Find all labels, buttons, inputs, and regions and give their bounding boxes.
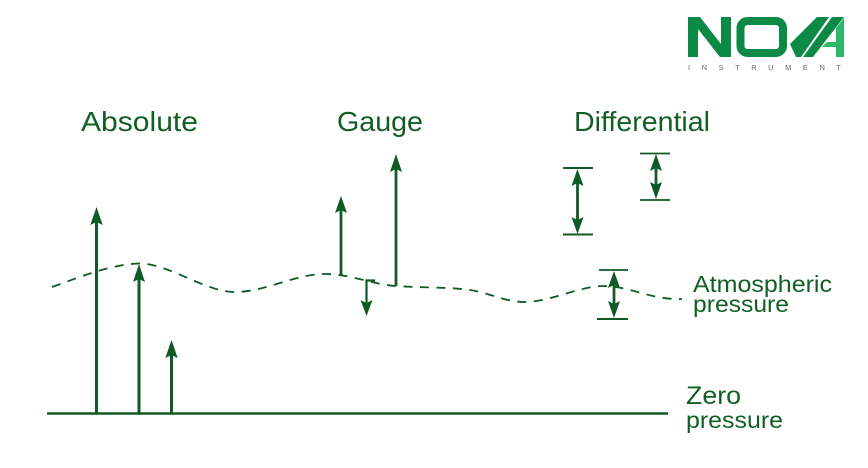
label: atmospheric pressure: pressure [693, 291, 789, 317]
heading: Gauge: Gauge [337, 106, 423, 137]
label: atmospheric pressure [693, 271, 832, 317]
arrow: gauge negative [360, 280, 375, 316]
arrow: absolute high [90, 207, 103, 413]
arrow: gauge positive tall [390, 154, 402, 286]
heading: Differential: Differential [574, 106, 710, 137]
differential pair one [563, 168, 593, 234]
differential pair two [640, 154, 670, 200]
absolute arrows [90, 207, 178, 413]
logo tagline: INSTRUMENT [688, 63, 841, 72]
gauge arrows [335, 154, 402, 316]
logo letter A dark stroke [803, 17, 844, 57]
arrow: absolute atmospheric [133, 264, 145, 413]
zero pressure baseline [47, 412, 668, 415]
differential pair three [597, 270, 628, 319]
heading: Absolute: Absolute [81, 106, 198, 137]
logo letter A crossbar [822, 42, 836, 47]
logo letter O [740, 21, 783, 53]
label: atmospheric pressure: Atmospheric [693, 271, 832, 297]
logo letter N [688, 17, 731, 57]
label: zero pressure: Zero [686, 382, 741, 410]
logo letter A light stroke [836, 18, 844, 57]
label: zero pressure: pressure [686, 407, 783, 433]
arrow: gauge positive short [335, 196, 347, 276]
logo: Nova Instrument [688, 17, 844, 72]
label: zero pressure [686, 382, 783, 433]
atmospheric pressure dashed line [52, 264, 682, 302]
differential arrows [563, 154, 670, 319]
logo letter V [790, 17, 829, 57]
arrow: absolute low [165, 340, 178, 413]
